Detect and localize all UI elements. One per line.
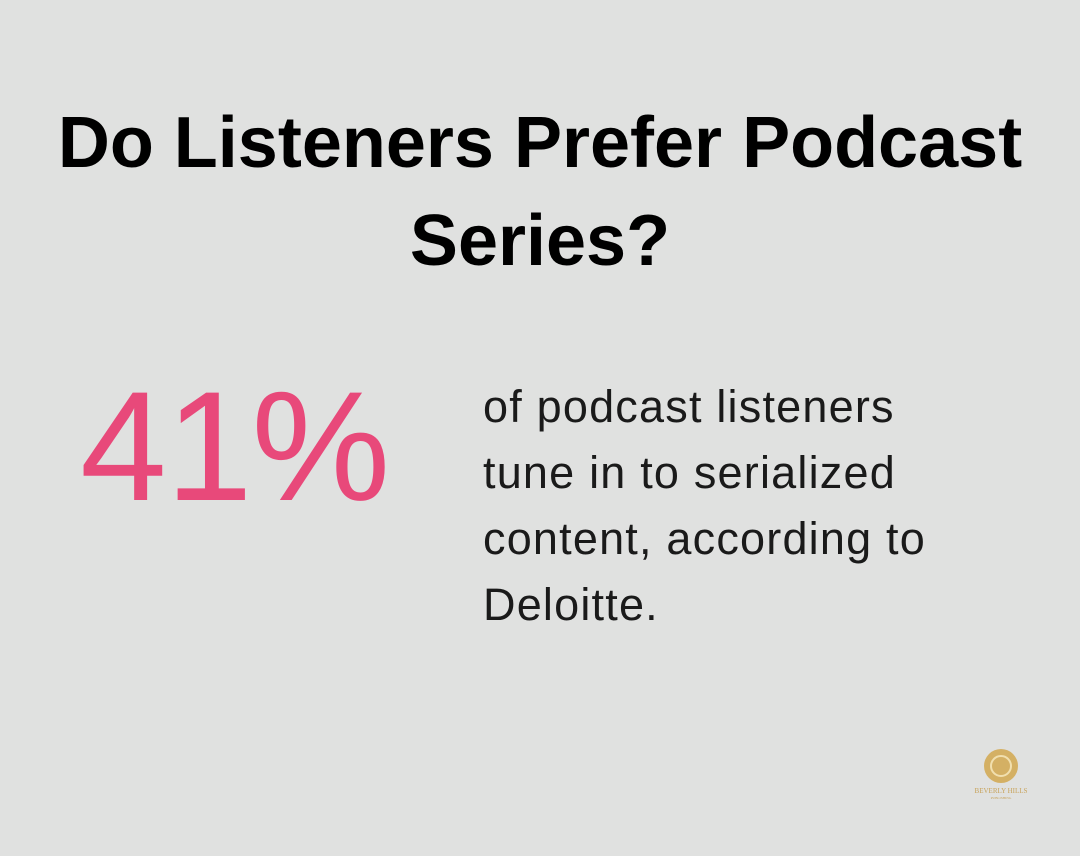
logo: PUBLISHING xyxy=(991,796,1012,800)
description text: tune in to serialized xyxy=(483,447,896,498)
description text: content, according to xyxy=(483,513,926,564)
description text: of podcast listeners xyxy=(483,381,895,432)
logo xyxy=(974,749,1028,800)
title: Do Listeners Prefer Podcast xyxy=(58,103,1022,183)
big number: 41% xyxy=(80,360,389,534)
description text xyxy=(483,381,926,630)
description text: Deloitte. xyxy=(483,579,659,630)
title xyxy=(58,103,1022,281)
title: Series? xyxy=(410,201,670,281)
logo: BEVERLY HILLS xyxy=(975,787,1028,795)
